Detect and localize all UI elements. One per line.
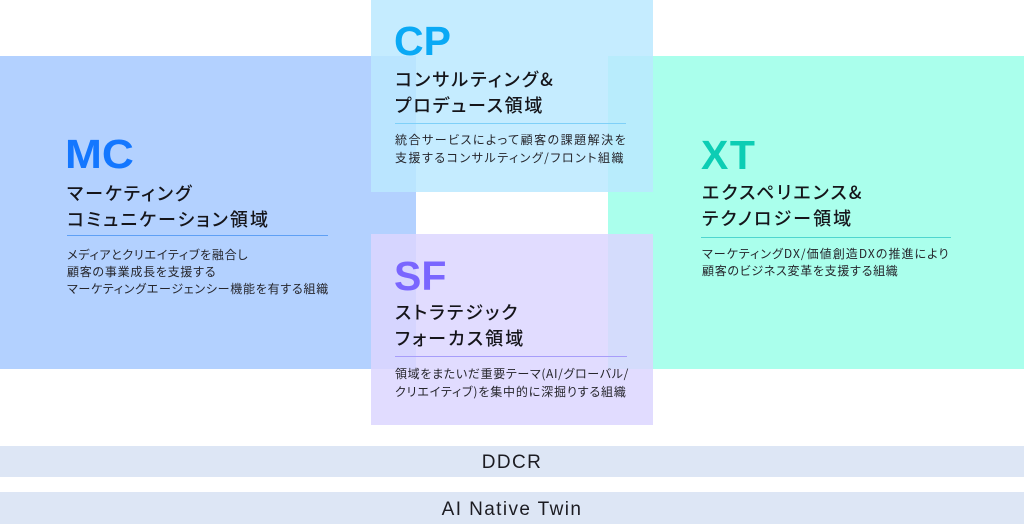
MC description: メディアとクリエイティブを融合し: [67, 246, 248, 263]
SF heading: フォーカス領域: [395, 325, 525, 351]
MC logo: MC: [65, 131, 134, 177]
band: DDCR: DDCR: [482, 452, 542, 473]
CP logo: CP: [394, 18, 451, 64]
XT description: 顧客のビジネス変革を支援する組織: [702, 262, 898, 279]
CP description: [395, 131, 627, 166]
XT description: マーケティングDX/価値創造DXの推進により: [702, 245, 949, 262]
panel: CP consulting produce: [371, 0, 653, 192]
band: DDCR: [0, 446, 1024, 477]
XT logo: XT: [701, 132, 756, 178]
SF logo: SF: [394, 253, 446, 299]
panel: MC marketing communication: [0, 56, 416, 369]
MC description: マーケティングエージェンシー機能を有する組織: [67, 280, 329, 297]
XT heading: テクノロジー領域: [702, 205, 853, 231]
band: AI Native Twin: AI Native Twin: [442, 499, 582, 520]
CP divider: [395, 123, 626, 124]
MC divider: [67, 235, 328, 236]
band: AI Native Twin: [0, 492, 1024, 524]
MC description: 顧客の事業成長を支援する: [67, 263, 216, 280]
CP heading: コンサルティング&: [395, 66, 555, 92]
XT heading: [702, 179, 864, 231]
CP description: 支援するコンサルティング/フロント組織: [395, 149, 625, 166]
CP heading: [395, 66, 555, 118]
SF description: クリエイティブ)を集中的に深掘りする組織: [395, 383, 627, 400]
CP heading: プロデュース領域: [395, 92, 544, 118]
SF divider: [395, 356, 627, 357]
MC heading: コミュニケーション領域: [67, 206, 270, 232]
MC heading: マーケティング: [67, 180, 193, 206]
panel: SF strategic focus: [371, 234, 653, 425]
SF heading: ストラテジック: [395, 299, 520, 325]
SF heading: [395, 299, 525, 351]
XT heading: エクスペリエンス&: [702, 179, 864, 205]
XT description: [702, 245, 949, 279]
CP description: 統合サービスによって顧客の課題解決を: [395, 131, 627, 148]
MC description: [67, 246, 329, 297]
MC heading: [67, 180, 270, 232]
SF description: 領域をまたいだ重要テーマ(AI/グローバル/: [395, 365, 629, 382]
SF description: [395, 365, 629, 400]
XT divider: [701, 237, 951, 238]
panel: XT experience technology: [608, 56, 1024, 369]
